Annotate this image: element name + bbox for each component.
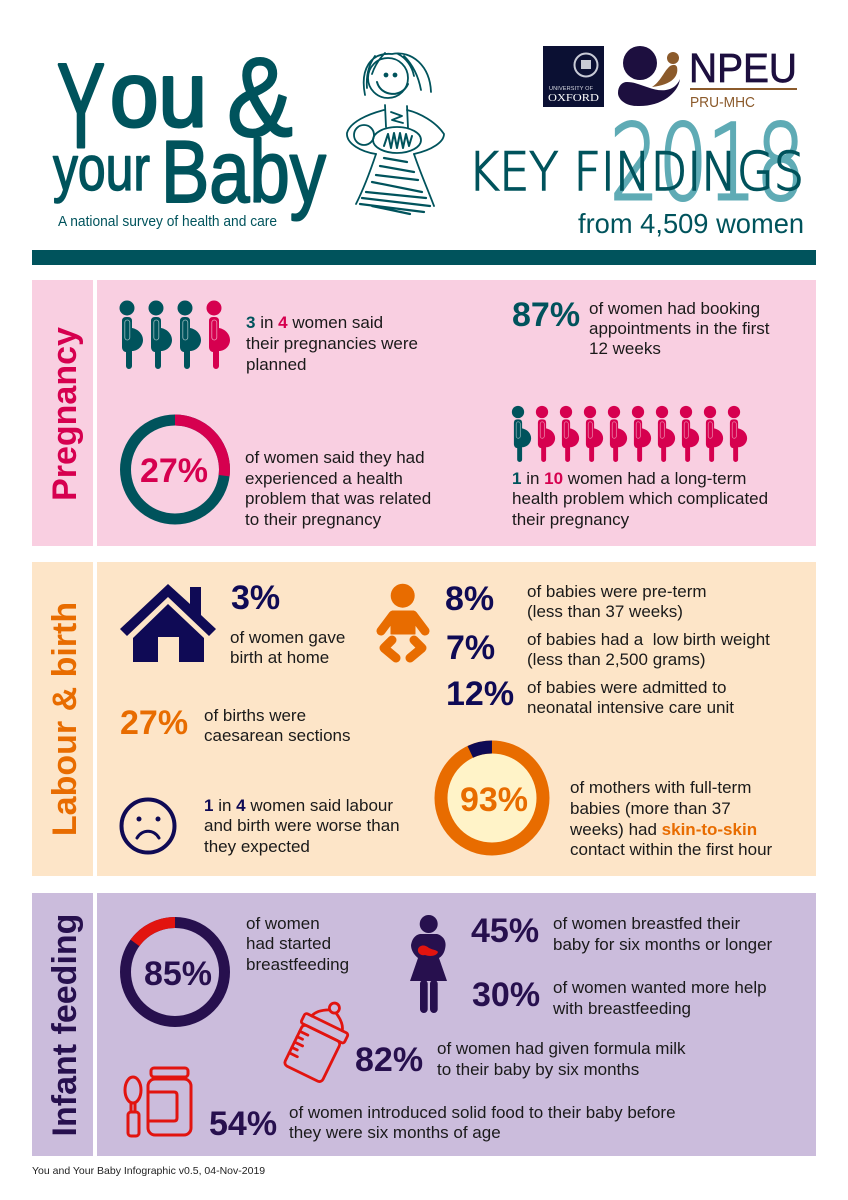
text: formula milk: to their baby by six months: [437, 1060, 639, 1079]
text: babies details: of babies had a low birth weight: [527, 630, 770, 649]
donut: 93%: [424, 730, 560, 866]
icon: sad face: [122, 800, 174, 852]
icon: house: [120, 584, 216, 662]
text: 1 in 10: their pregnancy: [512, 510, 630, 529]
title: You & your Baby: Baby: [161, 122, 326, 221]
text: skin-to-skin: weeks) had skin-to-skin: [570, 820, 757, 839]
text: health problem: to their pregnancy: [245, 510, 382, 529]
stat: 82%: 82%: [355, 1041, 423, 1079]
logo: NPEU PRU-MHC: NPEU: [689, 45, 797, 91]
heading: KEY FINDINGS: KEY FINDINGS: [468, 142, 804, 203]
logo: University of Oxford: UNIVERSITY OF: [549, 86, 594, 92]
section label: Infant feeding: Infant feeding: [46, 914, 84, 1136]
stat: 54%: 54%: [209, 1105, 277, 1143]
donut: 93%: 93%: [460, 781, 528, 819]
text: booking appointments: 12 weeks: [589, 339, 661, 358]
text: babies details: of babies were admitted to: [527, 678, 726, 697]
text: 1 in 10: 1 in 10 women had a long-term: [512, 469, 746, 488]
text: breastfed six months: baby for six months or longer: [553, 935, 773, 954]
stats: babies: 12%: [446, 675, 514, 713]
donut: 85%: 85%: [144, 955, 212, 993]
text: solid food: they were six months of age: [289, 1123, 501, 1142]
text: babies details: (less than 37 weeks): [527, 602, 683, 621]
text: skin-to-skin: contact within the first hour: [570, 840, 773, 859]
text: more help: of women wanted more help: [553, 978, 767, 997]
text: health problem: of women said they had: [245, 448, 425, 467]
header: [53, 35, 805, 239]
stat: 3%: 3%: [231, 579, 280, 617]
icon: mother with baby: [410, 915, 447, 1013]
text: started breastfeeding: breastfeeding: [246, 955, 349, 974]
text: birth at home: birth at home: [230, 648, 329, 667]
tagline: A national survey of health and care: [58, 213, 277, 230]
illustration: mother holding baby: [347, 53, 444, 214]
text: 3 in 4 planned: their pregnancies were: [246, 334, 418, 353]
text: booking appointments: appointments in the first: [589, 319, 770, 338]
donut: 27%: 27%: [140, 452, 208, 490]
text: worse than expected: and birth were worse than: [204, 816, 400, 835]
text: 3 in 4 planned: planned: [246, 355, 307, 374]
stats: babies: 8%: [445, 580, 494, 618]
subheading: from 4,509 women: from 4,509 women: [578, 208, 804, 239]
text: 3 in 4 planned: 3 in 4 women said: [246, 313, 383, 332]
stats: babies: 7%: [446, 629, 495, 667]
text: babies details: neonatal intensive care unit: [527, 698, 734, 717]
text: birth at home: of women gave: [230, 628, 345, 647]
text: worse than expected: 1 in 4 women said labour: [204, 796, 393, 815]
text: caesarean sections: of births were: [204, 706, 306, 725]
text: formula milk: of women had given formula milk: [437, 1039, 686, 1058]
text: babies details: (less than 2,500 grams): [527, 650, 706, 669]
stat: 30%: 30%: [472, 976, 540, 1014]
text: worse than expected: they expected: [204, 837, 310, 856]
title: You & your Baby: [53, 35, 326, 221]
text: babies details: of babies were pre-term: [527, 582, 707, 601]
title: You & your Baby: ou: [110, 44, 207, 146]
logo: University of Oxford: OXFORD: [548, 93, 599, 104]
panel: Labour & birth: [32, 562, 816, 876]
title: You & your Baby: &: [227, 35, 293, 160]
text: health problem: experienced a health: [245, 469, 403, 488]
title: You & your Baby: Y: [57, 39, 105, 173]
footer note: You and Your Baby Infographic v0.5, 04-Nov-2019: [32, 1165, 265, 1177]
pictogram: 3 in 4: [120, 300, 230, 369]
title: You & your Baby: your: [53, 134, 150, 204]
stat: 45%: 45%: [471, 912, 539, 950]
text: caesarean sections: caesarean sections: [204, 726, 350, 745]
text: started breastfeeding: had started: [246, 934, 331, 953]
text: started breastfeeding: of women: [246, 914, 320, 933]
icon: baby: [381, 584, 425, 658]
icon: spoon and jar: [125, 1068, 191, 1136]
stat: 87%: 87%: [512, 296, 580, 334]
header bar: [32, 250, 816, 265]
panel: Infant feeding: [32, 893, 816, 1156]
logo: NPEU PRU-MHC: [618, 45, 797, 111]
section label: Pregnancy: Pregnancy: [46, 327, 84, 501]
donut: 85%: [106, 903, 244, 1041]
icon: baby bottle: [281, 993, 358, 1084]
logo: NPEU PRU-MHC: PRU-MHC: [690, 95, 755, 111]
text: 1 in 10: health problem which complicated: [512, 489, 768, 508]
donut: 27%: [126, 420, 224, 519]
text: skin-to-skin: of mothers with full-term: [570, 778, 751, 797]
text: booking appointments: of women had booking: [589, 299, 760, 318]
text: solid food: of women introduced solid food to their baby before: [289, 1103, 676, 1122]
pictogram: 1 in 10: [512, 406, 747, 462]
text: health problem: problem that was related: [245, 489, 431, 508]
logo: University of Oxford: [543, 46, 604, 107]
text: more help: with breastfeeding: [552, 999, 691, 1018]
stat: 27% caesarean: 27%: [120, 704, 188, 742]
text: skin-to-skin: babies (more than 37: [570, 799, 731, 818]
text: breastfed six months: of women breastfed their: [553, 914, 740, 933]
stats: babies: [445, 580, 514, 713]
panel: Pregnancy: [32, 280, 816, 546]
section label: Labour & birth: Labour & birth: [46, 602, 84, 836]
